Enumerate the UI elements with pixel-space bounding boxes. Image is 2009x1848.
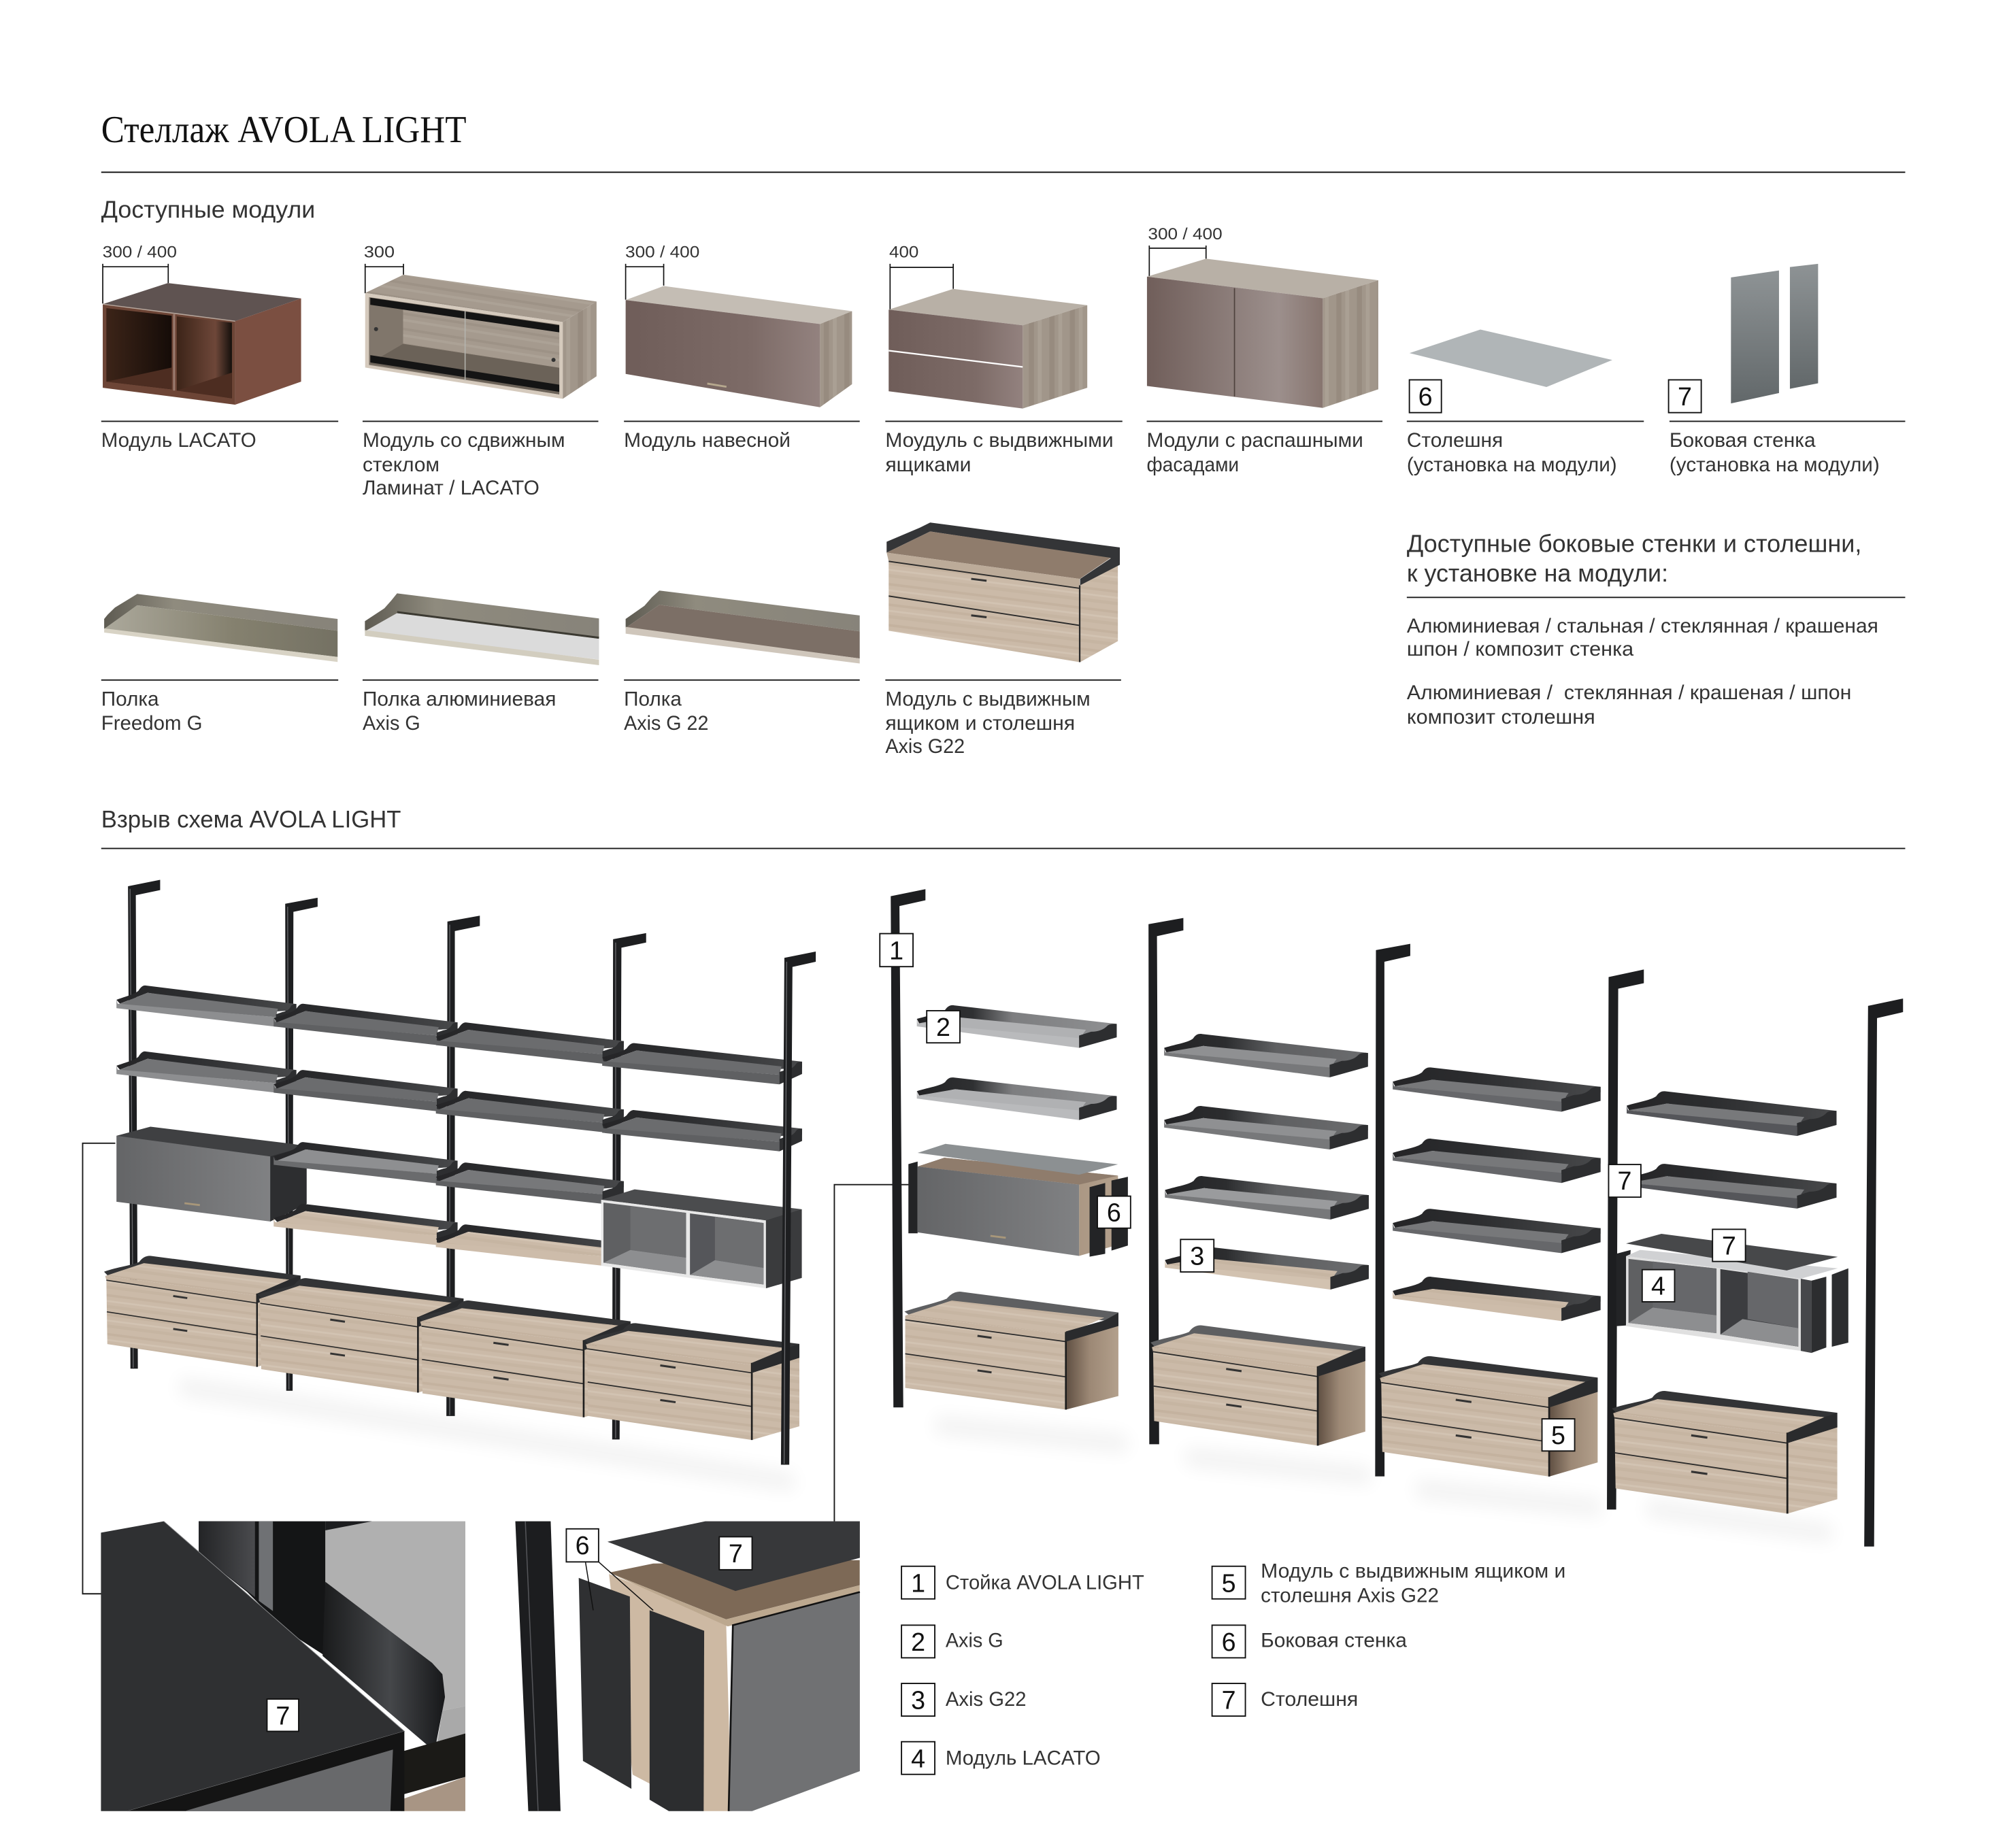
text block: available side walls and tops: Алюминиевая / стеклянная / крашеная / шпон xyxy=(1407,682,1851,704)
legend item 4 xyxy=(901,1742,1101,1775)
panel: drawer module xyxy=(889,243,1087,409)
legend item 7: Столешня xyxy=(1261,1689,1358,1711)
caption: hinged door module: фасадами xyxy=(1147,454,1239,476)
badge 4: 4 xyxy=(1651,1272,1665,1300)
panel: aluminium shelf Axis G: Axis G xyxy=(363,713,420,735)
assembled shelving unit xyxy=(104,880,816,1492)
badge 2 xyxy=(927,1011,960,1043)
legend xyxy=(901,1561,1565,1775)
badge 2: 2 xyxy=(936,1013,950,1041)
panel: side wall xyxy=(1669,264,1818,413)
panel: module LACATO xyxy=(103,243,301,405)
badge 6 on hanging module: 6 xyxy=(1107,1198,1121,1226)
detail image 1: 7 xyxy=(276,1701,290,1730)
legend item 2: 2 xyxy=(911,1628,925,1656)
panel: hinged door module xyxy=(1147,225,1378,408)
badge 5: 5 xyxy=(1551,1421,1565,1449)
badge 1: 1 xyxy=(889,936,903,964)
title: Стеллаж AVOLA LIGHT xyxy=(101,109,467,151)
legend item 7 xyxy=(1212,1683,1358,1716)
heading: exploded diagram: Взрыв схема AVOLA LIGHT xyxy=(101,806,401,833)
panel: shelf Axis G 22: Axis G 22 xyxy=(624,713,708,735)
exploded post 1 xyxy=(891,889,925,1407)
caption: module with sliding glass xyxy=(363,421,598,499)
legend item 2: Axis G xyxy=(946,1630,1003,1651)
legend item 5: 5 xyxy=(1222,1568,1236,1597)
badge 7 on top xyxy=(1712,1229,1746,1262)
panel: tabletop: 6 xyxy=(1418,382,1433,411)
panel: module with sliding glass: 300 xyxy=(364,243,395,261)
caption: module with sliding glass: стеклом xyxy=(363,454,439,476)
caption: module with sliding glass: Модуль со сдвижным xyxy=(363,430,565,452)
panel: shelf Freedom G: Freedom G xyxy=(101,713,203,735)
legend item 3: 3 xyxy=(911,1686,925,1715)
panel: drawer module: 400 xyxy=(889,243,918,261)
caption: hinged door module: Модули с распашными xyxy=(1147,430,1363,452)
legend item 5: Модуль с выдвижным ящиком и xyxy=(1261,1561,1565,1583)
legend item 6: 6 xyxy=(1222,1628,1236,1656)
exploded post 2 xyxy=(1148,918,1183,1444)
caption: side wall: (установка на модули) xyxy=(1670,454,1880,476)
panel: module LACATO: 300 / 400 xyxy=(103,243,177,261)
caption: drawer module: Моудуль с выдвижными xyxy=(885,430,1114,452)
exploded post 4 xyxy=(1607,969,1644,1509)
exploded drawer module column 1 xyxy=(904,1292,1127,1454)
caption: tabletop: Столешня xyxy=(1407,430,1503,452)
connector line to detail 1 xyxy=(82,1143,115,1594)
exploded shelves column 1 xyxy=(917,1005,1116,1120)
exploded column 4 xyxy=(1612,1091,1848,1543)
legend item 2 xyxy=(901,1625,1003,1658)
panel: aluminium shelf Axis G: Полка алюминиевая xyxy=(363,688,556,710)
badge 4 xyxy=(1642,1270,1674,1302)
legend item 4: 4 xyxy=(911,1744,925,1773)
badge 3: 3 xyxy=(1190,1241,1204,1270)
exploded hanging module with panels xyxy=(908,1144,1128,1257)
badge 7 on top: 7 xyxy=(1722,1231,1736,1260)
exploded post 3 xyxy=(1375,944,1410,1477)
caption: module LACATO: Модуль LACATO xyxy=(101,430,256,452)
badge 6 on hanging module xyxy=(1097,1196,1131,1228)
legend item 1: 1 xyxy=(911,1568,925,1597)
legend item 6: Боковая стенка xyxy=(1261,1630,1408,1651)
exploded column 2 xyxy=(1150,1034,1371,1485)
panel: hanging module xyxy=(625,243,852,407)
legend item 1: Стойка AVOLA LIGHT xyxy=(946,1573,1144,1594)
badge 7 on post xyxy=(1608,1164,1641,1197)
detail image 2 xyxy=(515,1522,860,1811)
exploded column 3 xyxy=(1378,1067,1601,1517)
panel: shelf Freedom G xyxy=(101,594,338,735)
panel: drawer module with top Axis G22: ящиком и столешня xyxy=(885,713,1075,735)
panel: shelf Freedom G: Полка xyxy=(101,688,159,710)
exploded post 5 xyxy=(1864,998,1903,1547)
text block: available side walls and tops: Доступные боковые стенки и столешни, xyxy=(1407,531,1861,558)
panel: side wall: 7 xyxy=(1678,382,1692,411)
legend item 3: Axis G22 xyxy=(946,1689,1027,1711)
legend item 5: столешня Axis G22 xyxy=(1261,1585,1439,1607)
legend item 1 xyxy=(901,1566,1144,1599)
panel: drawer module with top Axis G22 xyxy=(885,522,1121,758)
panel: shelf Axis G 22: Полка xyxy=(624,688,682,710)
caption: module with sliding glass: Ламинат / LACATO xyxy=(363,477,539,499)
legend item 3 xyxy=(901,1683,1027,1716)
caption: drawer module xyxy=(885,421,1123,476)
legend item 5 xyxy=(1212,1561,1565,1607)
text block: available side walls and tops: шпон / композит стенка xyxy=(1407,639,1634,660)
panel: drawer module with top Axis G22: Axis G22 xyxy=(885,736,965,758)
panel: aluminium shelf Axis G xyxy=(363,593,599,735)
caption: tabletop: (установка на модули) xyxy=(1407,454,1617,476)
caption: side wall: Боковая стенка xyxy=(1670,430,1816,452)
detail image 2: 6 xyxy=(576,1531,590,1560)
detail image 2: 7 xyxy=(729,1539,743,1568)
text block: available side walls and tops xyxy=(1407,531,1905,728)
heading: available modules: Доступные модули xyxy=(101,197,315,223)
caption: tabletop xyxy=(1407,421,1644,476)
panel: shelf Axis G 22 xyxy=(624,590,860,735)
caption: hanging module: Модуль навесной xyxy=(624,430,791,452)
connector line to detail 2 xyxy=(834,1185,909,1522)
panel: tabletop xyxy=(1410,329,1612,413)
caption: side wall xyxy=(1670,421,1905,476)
panel: module with sliding glass xyxy=(364,243,597,399)
legend item 7: 7 xyxy=(1222,1686,1236,1715)
caption: drawer module: ящиками xyxy=(885,454,972,476)
caption: hinged door module xyxy=(1147,421,1382,476)
panel: hinged door module: 300 / 400 xyxy=(1148,225,1223,243)
text block: available side walls and tops: к установке на модули: xyxy=(1407,560,1668,587)
panel: hanging module: 300 / 400 xyxy=(625,243,699,261)
panel: drawer module with top Axis G22: Модуль с выдвижным xyxy=(885,688,1091,710)
legend item 6 xyxy=(1212,1625,1408,1658)
legend item 4: Модуль LACATO xyxy=(946,1748,1101,1770)
detail image 1 xyxy=(101,1522,465,1811)
text block: available side walls and tops: композит столешня xyxy=(1407,707,1595,728)
badge 1 xyxy=(880,934,913,967)
badge 5 xyxy=(1542,1419,1575,1451)
badge 3 xyxy=(1180,1239,1214,1272)
badge 7 on post: 7 xyxy=(1618,1166,1631,1195)
text block: available side walls and tops: Алюминиевая / стальная / стеклянная / крашеная xyxy=(1407,616,1878,637)
